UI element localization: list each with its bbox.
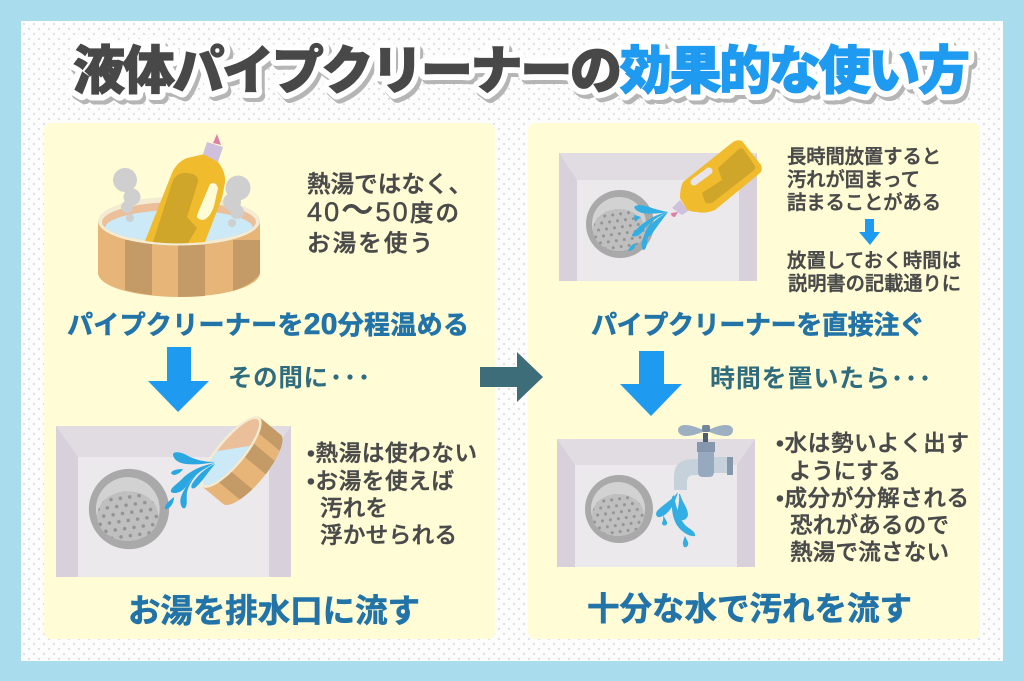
bottle (145, 154, 225, 243)
arrow: down left (148, 347, 209, 412)
text: use warm water: 40～50度の (307, 192, 459, 228)
heading: flush with water: 十分な水で汚れを流す (587, 591, 912, 627)
illustration: sink with bottle (559, 140, 762, 281)
heading: warm the cleaner: パイプクリーナーを20分程温める (67, 308, 469, 341)
title: 液体パイプクリーナーの効果的な使い方 (73, 43, 970, 101)
heading: pour into drain: お湯を排水口に流す (128, 593, 420, 629)
text: warning about leaving too long: 放置しておく時間は (787, 250, 961, 272)
arrow: small down (859, 219, 880, 245)
label: after some time: 時間を置いたら (710, 365, 890, 393)
text: use warm water: お湯を使う (307, 230, 433, 256)
illustration: sink with tub pouring (56, 408, 295, 577)
tilted tub (200, 416, 282, 505)
bottle (680, 140, 762, 213)
steam (113, 168, 250, 227)
icon: bottle warming in wooden tub (98, 134, 260, 297)
water splash (165, 452, 215, 509)
title: 液体パイプクリーナーの効果的な使い方 (73, 43, 970, 101)
drain (586, 190, 654, 258)
text: bullets left: •熱湯は使わない (307, 441, 477, 466)
title: 液体パイプクリーナーの効果的な使い方 (76, 47, 973, 105)
panel: left step (44, 123, 495, 639)
text: warning about leaving too long: 説明書の記載通りに (788, 273, 961, 295)
text: use warm water: 熱湯ではなく、 (307, 171, 472, 197)
text: bullets left: •お湯を使えば (307, 469, 454, 494)
faucet (674, 425, 733, 490)
text: bullets right (776, 431, 969, 565)
text: warning about leaving too long (787, 146, 961, 295)
text: bullets left: 汚れを (320, 496, 388, 521)
arrow: down right (620, 351, 682, 416)
drain (585, 475, 653, 543)
text: bullets right: 熱湯で流さない (790, 540, 949, 565)
text: warning about leaving too long: 詰まることがある (787, 192, 941, 214)
panel: right step (528, 123, 980, 639)
text: warning about leaving too long: 汚れが固まって (787, 169, 920, 191)
water splash (628, 205, 668, 251)
illustration: sink with faucet (557, 425, 755, 567)
text: use warm water (307, 171, 472, 256)
text: bullets right: ようにする (789, 459, 901, 484)
text: bullets left (307, 441, 477, 548)
text: bullets right: 恐れがあるので (790, 513, 949, 538)
water splash (656, 492, 695, 547)
text: bullets left: 浮かせられる (320, 523, 457, 548)
label: meanwhile: その間に (228, 365, 328, 392)
drain (89, 469, 169, 549)
text: bullets right: •水は勢いよく出す (776, 431, 969, 456)
text: bullets right: •成分が分解される (776, 486, 969, 511)
heading: pour directly: パイプクリーナーを直接注ぐ (591, 310, 925, 340)
text: warning about leaving too long: 長時間放置すると (787, 146, 941, 168)
arrow: to right panel (480, 352, 543, 402)
